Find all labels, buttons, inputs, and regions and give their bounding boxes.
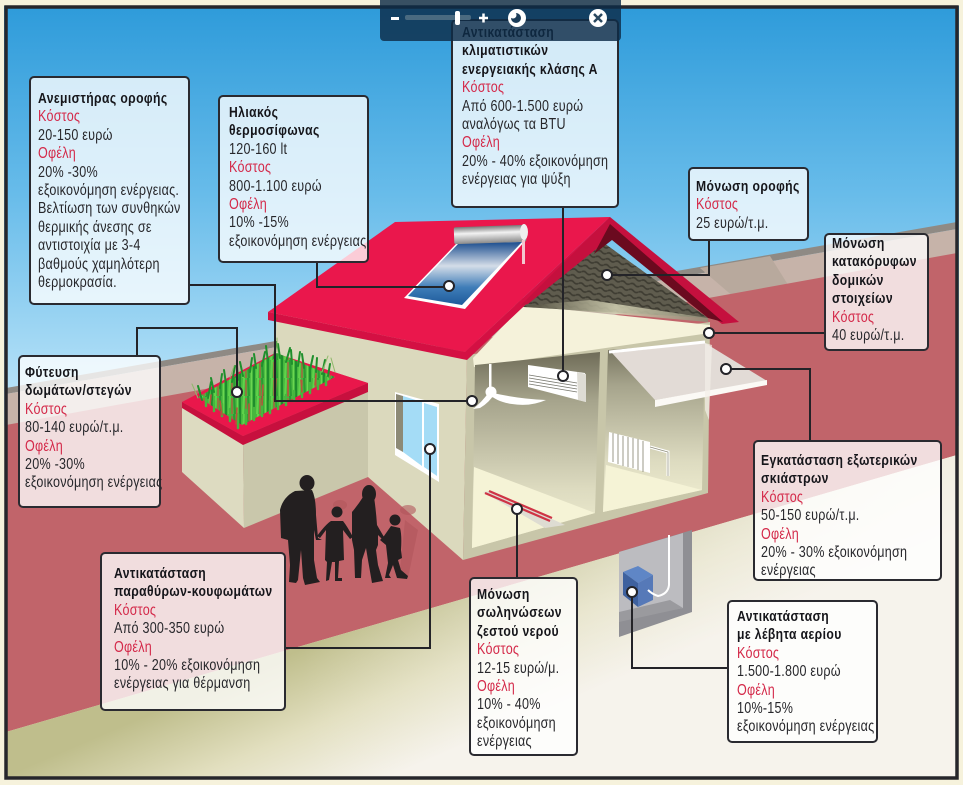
panel: hot water pipe insulation: Οφέλη — [477, 678, 515, 695]
panel: gas boiler replacement: Οφέλη — [737, 682, 775, 699]
roof insulation — [523, 238, 708, 318]
panel: windows replacement — [100, 552, 286, 711]
callout dots — [232, 270, 731, 597]
panel: vertical elements insulation: δομικών — [832, 272, 884, 289]
panel: green roofs: δωμάτων/στεγών — [25, 382, 132, 399]
panel: green roofs: εξοικονόμηση ενέργειας — [25, 474, 162, 491]
panel: green roofs: 20% -30% — [25, 456, 85, 473]
panel: roof fan: Οφέλη — [38, 145, 76, 162]
panel: air conditioners: 20% - 40% εξοικονόμηση — [462, 153, 608, 170]
panel: roof fan: θερμικής άνεσης σε — [38, 219, 152, 236]
panel: roof fan: Κόστος — [38, 108, 80, 125]
panel: gas boiler replacement: με λέβητα αερίου — [737, 626, 842, 643]
right gable roof edge — [520, 217, 739, 324]
panel: solar water heater: θερμοσίφωνας — [229, 122, 320, 139]
panel: air conditioners: κλιματιστικών — [462, 42, 548, 59]
father — [280, 475, 322, 585]
panel: external shades: 50-150 ευρώ/τ.μ. — [761, 507, 860, 524]
panel: air conditioners: Αντικατάσταση — [462, 24, 554, 41]
panel: solar water heater: Ηλιακός — [229, 104, 278, 121]
panel: external shades: σκιάστρων — [761, 470, 829, 487]
panel: gas boiler replacement: 1.500-1.800 ευρώ — [737, 663, 841, 680]
panel: air conditioners: αναλόγως τα BTU — [462, 116, 566, 133]
panel: hot water pipe insulation: Κόστος — [477, 641, 519, 658]
panel: windows replacement: Από 300-350 ευρώ — [114, 620, 224, 637]
panel: gas boiler replacement — [727, 600, 878, 743]
room left — [472, 352, 600, 548]
panel: green roofs: 80-140 ευρώ/τ.μ. — [25, 419, 124, 436]
panel: windows replacement: Οφέλη — [114, 639, 152, 656]
red roof — [268, 217, 610, 352]
panel: roof fan: βαθμούς χαμηλότερη — [38, 256, 160, 273]
panel: roof fan: εξοικονόμηση ενέργειας. — [38, 182, 179, 199]
panel: windows replacement: Αντικατάσταση — [114, 565, 206, 582]
panel: gas boiler replacement: εξοικονόμηση ενέργειας — [737, 718, 874, 735]
panel: air conditioners: Από 600-1.500 ευρώ — [462, 98, 583, 115]
left wall — [275, 312, 467, 560]
child two — [380, 514, 408, 579]
lower ground — [6, 455, 957, 778]
panel: gas boiler replacement: 10%-15% — [737, 700, 793, 717]
green roof grass — [192, 338, 335, 428]
pink ground — [6, 253, 957, 732]
panel: windows replacement: Κόστος — [114, 602, 156, 619]
boiler pipe — [648, 535, 669, 596]
panel: roof insulation: Μόνωση οροφής — [696, 178, 800, 195]
leader lines — [137, 207, 824, 668]
panel: roof fan: 20% -30% — [38, 164, 98, 181]
panel: green roofs: Κόστος — [25, 401, 67, 418]
sky — [4, 6, 959, 426]
panel: roof fan: 20-150 ευρώ — [38, 127, 113, 144]
panel: roof insulation — [688, 167, 809, 241]
ceiling fan — [473, 364, 546, 409]
panel: windows replacement: ενέργειας για θέρμανση — [114, 675, 250, 692]
air conditioner unit — [528, 365, 586, 402]
panel: hot water pipe insulation: εξοικονόμηση — [477, 715, 556, 732]
window — [395, 392, 439, 482]
panel: hot water pipe insulation: 12-15 ευρώ/μ. — [477, 660, 559, 677]
mother — [352, 485, 384, 583]
panel: external shades: ενέργειας — [761, 562, 816, 579]
panel: gas boiler replacement: Αντικατάσταση — [737, 608, 829, 625]
reset icon — [508, 9, 526, 27]
side annex — [182, 338, 368, 528]
panel: roof fan: θερμοκρασία. — [38, 274, 117, 291]
panel: vertical elements insulation: 40 ευρώ/τ.μ. — [832, 327, 904, 344]
panel: gas boiler replacement: Κόστος — [737, 645, 779, 662]
child one — [317, 506, 353, 581]
panel: roof insulation: Κόστος — [696, 196, 738, 213]
awning — [609, 342, 767, 420]
radiator — [608, 432, 668, 476]
panel: external shades: 20% - 30% εξοικονόμηση — [761, 544, 907, 561]
panel: hot water pipe insulation: ζεστού νερού — [477, 623, 559, 640]
panel: solar water heater: εξοικονόμηση ενέργειας — [229, 233, 366, 250]
panel: windows replacement: παραθύρων-κουφωμάτων — [114, 583, 273, 600]
panel: air conditioners — [451, 19, 619, 208]
panel: solar water heater: 800-1.100 ευρώ — [229, 178, 322, 195]
close icon — [589, 9, 607, 27]
zoom slider — [405, 11, 471, 25]
panel: vertical elements insulation — [824, 233, 929, 351]
panel: external shades — [753, 440, 942, 581]
panel: solar water heater: 10% -15% — [229, 214, 289, 231]
insulated hot water pipes — [483, 491, 565, 528]
front frame wall — [463, 322, 710, 560]
icon: gas boiler — [623, 566, 653, 607]
panel: windows replacement: 10% - 20% εξοικονόμηση — [114, 657, 260, 674]
boiler pit — [619, 530, 692, 637]
panel: external shades: Εγκατάσταση εξωτερικών — [761, 452, 918, 469]
panel: roof fan — [29, 76, 190, 305]
panel: solar water heater: Κόστος — [229, 159, 271, 176]
panel: external shades: Κόστος — [761, 489, 803, 506]
panel: air conditioners: Κόστος — [462, 79, 504, 96]
panel: air conditioners: ενεργειακής κλάσης Α — [462, 61, 598, 78]
attic ceiling — [473, 305, 710, 367]
panel: air conditioners: ενέργειας για ψύξη — [462, 171, 571, 188]
background wall — [6, 222, 957, 428]
panel: vertical elements insulation: κατακόρυφων — [832, 253, 917, 270]
panel: hot water pipe insulation — [469, 577, 578, 756]
panel: solar water heater: Οφέλη — [229, 196, 267, 213]
solar water heater — [404, 224, 528, 309]
panel: solar water heater: 120-160 lt — [229, 141, 287, 158]
panel: hot water pipe insulation: σωληνώσεων — [477, 604, 562, 621]
panel: roof insulation: 25 ευρώ/τ.μ. — [696, 215, 768, 232]
panel: vertical elements insulation: στοιχείων — [832, 290, 893, 307]
plus icon — [479, 14, 488, 22]
panel: roof fan: Ανεμιστήρας οροφής — [38, 90, 168, 107]
panel: roof fan: αντιστοιχία με 3-4 — [38, 237, 141, 254]
family shadows — [333, 500, 418, 578]
panel: air conditioners: Οφέλη — [462, 134, 500, 151]
panel: hot water pipe insulation: ενέργειας — [477, 733, 532, 750]
panel: hot water pipe insulation: 10% - 40% — [477, 696, 541, 713]
minus icon — [391, 17, 399, 20]
house — [268, 217, 767, 560]
panel: roof fan: Βελτίωση των συνθηκών — [38, 200, 181, 217]
roof front edge — [268, 217, 610, 360]
panel: hot water pipe insulation: Μόνωση — [477, 586, 530, 603]
panel: solar water heater — [218, 95, 369, 263]
panel: vertical elements insulation: Μόνωση — [832, 235, 885, 252]
panel: green roofs: Οφέλη — [25, 438, 63, 455]
panel: green roofs — [18, 355, 161, 508]
zoom toolbar — [380, 0, 621, 41]
family silhouette — [280, 475, 408, 585]
panel: vertical elements insulation: Κόστος — [832, 309, 874, 326]
panel: external shades: Οφέλη — [761, 526, 799, 543]
panel: green roofs: Φύτευση — [25, 364, 79, 381]
room right — [603, 343, 705, 512]
